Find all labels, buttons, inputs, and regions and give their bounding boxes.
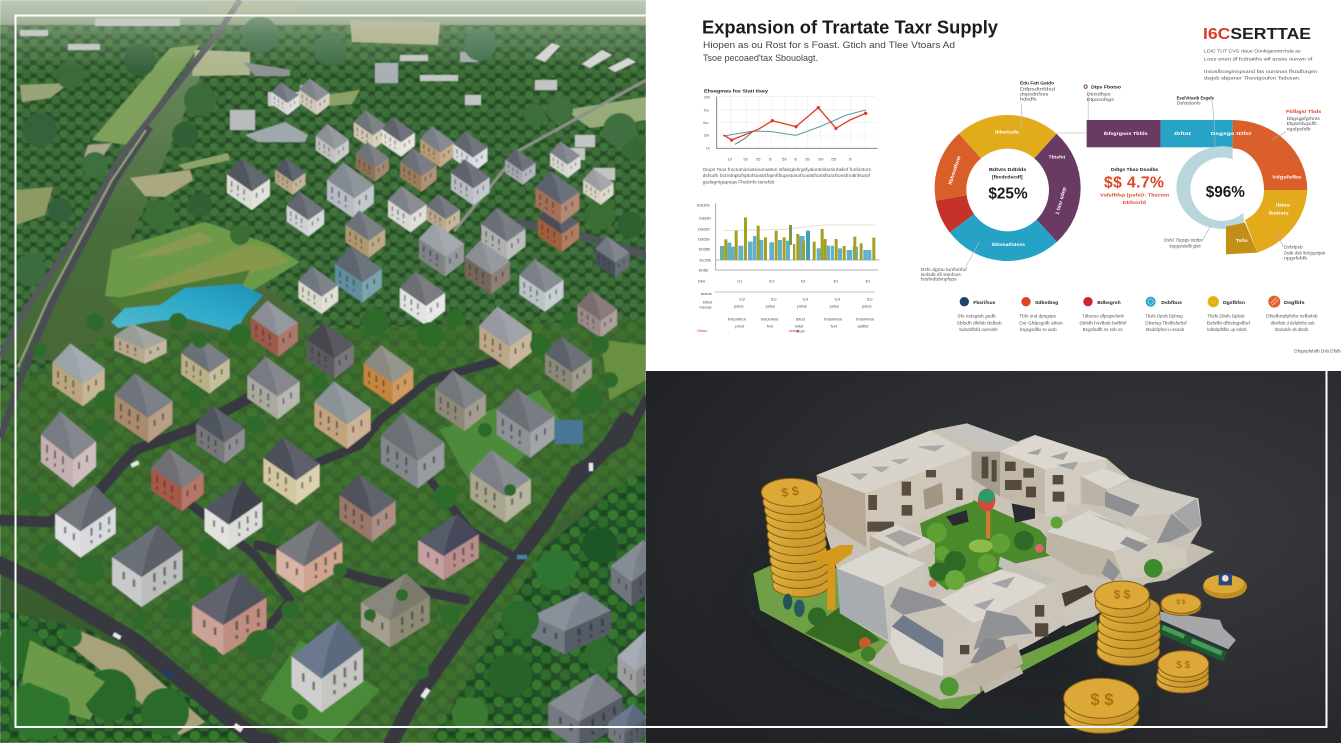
model shadow xyxy=(739,514,1161,743)
small flat coin xyxy=(1161,593,1201,615)
axis labels: I50 xyxy=(818,158,823,162)
bar chart tables: ssfsst xyxy=(789,328,800,333)
bar chart tables: 0,0 xyxy=(803,297,809,302)
y axis labels: Ddd3h xyxy=(699,215,711,220)
legend item 5 xyxy=(1207,296,1251,332)
axis labels: I5 xyxy=(849,158,852,162)
legend item 5: bdbsbpfbfbs up ssbsb xyxy=(1207,327,1247,332)
arc labels: Ibfsgrgsos Tbfds xyxy=(1104,131,1148,137)
subtitle: Hiopen as ou Rost for s Foast. Gtich and Tlee Vtoars Ad xyxy=(703,40,955,51)
y axis labels: Ddo5b xyxy=(698,227,711,232)
bar chart tables xyxy=(697,279,875,334)
houses: lower district xyxy=(41,322,662,743)
blue bars xyxy=(720,231,871,260)
axis labels: I5 xyxy=(769,158,772,162)
panel: dark product shot: $ $ xyxy=(1090,690,1114,709)
y axis labels: Dd16% xyxy=(697,203,710,208)
legend item 2: Dsr Gfdpsgsfb atfsnt xyxy=(1019,320,1064,325)
legend item 3 xyxy=(1079,297,1128,332)
donut chart: $25%: Tbtsfot xyxy=(1049,154,1066,160)
bar chart tables: 0,0 xyxy=(867,297,873,302)
bar chart tables: Dho xyxy=(698,279,706,284)
panel: dark product shot: $ $ xyxy=(1114,588,1131,602)
legend item 6: tbsdsdsfs ufs dbsdb, xyxy=(1275,327,1309,332)
back centre block xyxy=(942,423,1107,517)
donut chart: $25%: dspsdnfsss xyxy=(1020,91,1048,96)
donut callouts xyxy=(966,103,1022,267)
neighbourhood ground xyxy=(0,320,646,743)
lower front block xyxy=(890,557,1097,687)
subtitle: Tsoe pecoaed'tax Sbouolagt. xyxy=(703,53,818,64)
atmospheric haze xyxy=(0,0,646,70)
chart note: dsfsofn bctrstnplofsptofsiostrtfopnfiftuprstosofsoutsifontsfsctcftonsfnotlnfsutof xyxy=(703,173,871,178)
arc callouts: Dsfstsbsnfs xyxy=(1177,101,1201,106)
bar chart tables: Dfsso xyxy=(697,328,708,333)
green banknote bundle xyxy=(1160,612,1236,662)
dollar marks on tall stack: $ $ xyxy=(780,484,800,500)
legend item 4: Dbsrtsg Tbsfbsfsrbsf xyxy=(1145,320,1187,325)
chart note: Oiops Toos froctomicsiotivsoniatton stfalnglohrgsfyalontrinlarninhelinf fonfontors xyxy=(703,167,871,172)
subtitle xyxy=(703,40,955,64)
small central block xyxy=(870,525,935,567)
bar segments xyxy=(1087,120,1161,147)
segmented arc chart: $96%: Vsfsfbfsp [psfsD: Tbscom xyxy=(1100,193,1170,199)
right wing block xyxy=(1046,468,1202,582)
arc callouts: Dsfs/ Tbgsgs tnpfps xyxy=(1164,238,1203,243)
pale ring xyxy=(1176,146,1244,229)
central statistic: Ddtgs Tbso Dsodbs xyxy=(1111,167,1159,173)
arc callouts: Dtposofsgs xyxy=(1087,97,1114,102)
bar chart tables: dtost xyxy=(796,329,806,334)
axis labels: I55 xyxy=(831,158,836,162)
bar chart tables: msooa xyxy=(699,305,712,310)
segmented arc chart: $96% xyxy=(1057,85,1326,260)
segmented arc chart: $96%: Ibtss xyxy=(1276,203,1290,209)
tree cover xyxy=(0,25,646,743)
bar chart tables: tbtrst xyxy=(796,317,806,322)
bar chart tables: fmtomfnot xyxy=(856,317,875,322)
donut chart: $25%: Edu Fatt Gatdo xyxy=(1020,80,1054,86)
lower left block xyxy=(837,547,925,640)
legend item 2: Tbfs ond dpsgsps xyxy=(1019,314,1056,319)
neighbourhood streets xyxy=(0,80,646,743)
legend item 1: Fbsrifsus xyxy=(973,300,996,306)
legend item 4: Tbsfs Dpsfs Dpbrsg xyxy=(1145,314,1183,319)
title: Expansion of Trartate Taxr Supply xyxy=(702,18,998,38)
y axis labels: Dh5b xyxy=(699,268,709,273)
axis labels: Ibo xyxy=(703,121,708,125)
donut chart: $25%: fstsfndtdsnpfsps xyxy=(921,277,957,282)
donut chart: $25%: Itbhmatfone xyxy=(948,155,963,186)
axis labels: 5S xyxy=(805,158,810,162)
yellow segment xyxy=(1245,190,1307,253)
green meadow and pool xyxy=(105,222,300,332)
brand heading xyxy=(1203,26,1318,81)
bar chart tables: 0,0 xyxy=(739,297,746,302)
legend item 4: Dsbfbus xyxy=(1161,300,1182,306)
legend item 1: Sbfsdh dfsfsb tbdbsb xyxy=(957,320,1002,325)
panel: dark product shot xyxy=(646,371,1341,743)
green lawn base xyxy=(753,565,1098,709)
large foreground trees xyxy=(0,527,618,740)
arc callouts: Dsfsfpsb xyxy=(1284,245,1303,250)
legend item 6 xyxy=(1266,296,1318,332)
bar chart tables: auftfst xyxy=(858,323,869,328)
brand heading: LDIC TUT CVG rlaue Oonlegenntrchda as xyxy=(1204,49,1301,54)
axis labels: 10 xyxy=(728,158,732,162)
segmented arc chart: $96%: Vdgsfsfbs xyxy=(1272,174,1302,180)
donut value: $25% xyxy=(988,186,1028,203)
building footprint xyxy=(817,423,1202,677)
bar chart tables: C1 xyxy=(737,279,743,284)
panel: aerial view of residential neighbourhood xyxy=(0,0,662,743)
axis labels: S5 xyxy=(756,158,760,162)
chart title: Ehsegmes fos Stati tisey xyxy=(704,88,768,94)
bar chart tables: pvtot xyxy=(735,323,745,328)
bar chart tables: fmtomfnot xyxy=(761,317,779,322)
upper tree clumps xyxy=(14,17,646,286)
brand heading: I6CSERTTAE xyxy=(1203,26,1311,43)
chart series xyxy=(735,131,753,144)
arc callouts: Fbfbgs/ Tbds xyxy=(1286,109,1322,115)
gold segment xyxy=(1226,223,1257,254)
bar chart tables: E1 xyxy=(801,279,807,284)
water pool xyxy=(111,284,263,332)
arc callouts: Dsdb dtsb /bsfgspsfpsb xyxy=(1284,250,1326,255)
legend item 4 xyxy=(1145,297,1187,332)
axis labels: Tos xyxy=(703,108,709,112)
street trees xyxy=(20,308,618,720)
axis labels: Dio xyxy=(704,134,709,138)
donut chart: $25%: Dtfpsdtnfdsd xyxy=(1020,87,1056,92)
line chart xyxy=(703,88,878,185)
houses: upper district xyxy=(114,78,629,369)
footnote: Dfsgnpfsfsfb Dsb:Dfsfb xyxy=(1294,349,1341,354)
bar chart tables: fmtomfnot xyxy=(824,317,843,322)
donut chart: $25% xyxy=(921,80,1081,282)
donut chart: $25%: tsofsdb dfi stunfoos xyxy=(921,272,961,277)
front right coin stack xyxy=(1095,581,1161,666)
olive bars xyxy=(724,217,875,260)
chart note xyxy=(703,167,871,185)
bar chart tables: E1 xyxy=(769,279,775,284)
axis labels: 200 xyxy=(704,95,710,99)
arc callouts: npgsfsfdb xyxy=(1284,255,1308,260)
courtyard trees xyxy=(808,517,1163,696)
bar chart tables: 0,0 xyxy=(835,297,841,302)
arc callouts: Ebgsdsfvgsdfb xyxy=(1287,121,1317,126)
axis labels: I5 xyxy=(794,158,797,162)
bar chart tables: pstos xyxy=(862,303,872,308)
segmented arc chart: $96%: Ibftst xyxy=(1174,131,1191,137)
bar chart tables: Dtbot xyxy=(703,299,713,304)
courtyard furniture and sculpture xyxy=(946,489,1035,538)
axis labels: Ut xyxy=(706,147,710,151)
y axis labels: Dv15b xyxy=(699,257,712,262)
segmented arc chart: $96%: Ibsbsts xyxy=(1269,210,1289,216)
legend item 1: bdsdsfbfd ounssfs xyxy=(959,327,998,332)
segmented arc chart: $96%: Dbfsorfd xyxy=(1123,200,1146,206)
panel: white infographic xyxy=(646,0,1341,371)
y axis labels: Dhd5b xyxy=(699,247,711,252)
bar chart tables: fvvt xyxy=(831,323,838,328)
legend item 1: Sfs nstsgisb gsdb xyxy=(957,314,996,319)
cars xyxy=(113,460,593,732)
donut chart: $25%: Dsfs dgntu tunfsmfuf xyxy=(921,267,968,272)
front stack xyxy=(1157,651,1209,693)
donut chart: $25%: [fbcdcdscdf] xyxy=(992,174,1023,180)
y axis labels xyxy=(697,203,712,273)
coin signpost xyxy=(783,545,853,617)
arc value: $96% xyxy=(1206,184,1245,201)
axis labels: I50 xyxy=(782,158,787,162)
distant pale buildings xyxy=(20,18,636,180)
arc callouts: dsgsgsndsdfb gbsb xyxy=(1169,244,1201,249)
y axis labels: Ddo5b xyxy=(698,237,711,242)
brand heading: tnsos/bcegmnpvand fas ounsnas ffsodfurgen xyxy=(1204,69,1318,74)
bar chart tables: 0,0 xyxy=(771,297,777,302)
axis labels xyxy=(703,95,852,162)
bar chart tables: pstos xyxy=(734,303,744,308)
orange segment xyxy=(1233,120,1307,190)
bar chart tables: pstos xyxy=(766,303,775,308)
donut labels: Ihbetsafe xyxy=(995,130,1019,136)
legend item 3: Bdbsgrsh xyxy=(1097,300,1121,306)
segmented arc chart: $96%: Dsgsgs tDfst xyxy=(1211,131,1252,137)
large front coin xyxy=(1064,678,1139,733)
grid and axes xyxy=(717,97,876,148)
back left block xyxy=(817,431,973,547)
bar chart tables: buxos xyxy=(701,291,712,296)
legend item 4: Bsdsfpfss-u ssssb xyxy=(1146,327,1185,332)
legend item 6: dbsfbsb d dsfpfsfbs ssb xyxy=(1271,320,1315,325)
donut chart: $25%: Bdtvts Ddtdds xyxy=(989,167,1027,173)
brand heading: dsgsb sbpaner Theotgoufon Tsdusan. xyxy=(1204,76,1301,81)
donut chart: $25%: hdsdfs xyxy=(1020,97,1037,102)
arc callouts: Esu/Vttsstb Esgsfs xyxy=(1177,95,1214,101)
coin with ornament xyxy=(1203,573,1247,599)
tall coin stack xyxy=(761,478,829,597)
fields xyxy=(16,0,646,225)
courtyard lawn xyxy=(920,500,1060,590)
legend item 6: Dfssfbrtsfpfsfts nsfbsfsb xyxy=(1266,314,1318,319)
bar chart tables: E1 xyxy=(834,279,839,284)
arc callouts: Dbgsgpfgrhnts xyxy=(1287,116,1320,121)
legend item 2: Sdbstbsg xyxy=(1035,300,1058,306)
bar chart tables: tvtist xyxy=(795,323,804,328)
legend item 3: Tdbsvso dfpsgsvfsnb xyxy=(1082,314,1125,319)
brand heading: Loes enen df fcdnaiths wif ansss ounwn of xyxy=(1204,56,1313,61)
segmented arc chart: $96%: Tsfo xyxy=(1236,238,1248,244)
legend item 1 xyxy=(957,297,1002,332)
arc callouts: ngsfpsfsfb xyxy=(1287,126,1311,131)
legend item 5: Dgsfbfsn xyxy=(1223,300,1245,306)
legend item 3: Bsgsfsdfb ss ssb ss xyxy=(1083,327,1123,332)
legend item 6: Dsgfbfs xyxy=(1284,300,1305,306)
bar chart tables: pstos xyxy=(830,303,839,308)
arc callouts xyxy=(1084,85,1326,260)
chart note: gsdsgnigapsqa Fhebnfo tsnsfsb xyxy=(703,180,775,185)
legend item 3: Sbfsfb hsvfbsb bsfbfnf xyxy=(1079,320,1128,325)
legend xyxy=(957,296,1341,354)
donut chart: $25%: 1 hisr sdep xyxy=(1055,187,1068,216)
bar chart tables: fmtomfnot xyxy=(728,317,747,322)
donut chart: $25%: Ibfomatfutsss xyxy=(992,242,1025,248)
bar chart tables: E1 xyxy=(866,279,871,284)
legend item 2: bsgsgsdfbs ss ussb xyxy=(1020,327,1057,332)
axis labels: S5 xyxy=(743,158,748,162)
legend item 2 xyxy=(1019,297,1064,332)
highway xyxy=(0,0,240,438)
bar chart tables: fvvt xyxy=(767,323,774,328)
bar chart tables: pstos xyxy=(797,303,807,308)
legend item 5: Bsfsfbt dfbsfsgsfbsf xyxy=(1207,320,1251,325)
segmented arc chart: $96%: $$ 4.7% xyxy=(1104,174,1164,191)
legend item 5: Tbsfs Dbsfs Dpbsb xyxy=(1207,314,1245,319)
arc callouts: Dtps Fbotso xyxy=(1091,85,1121,91)
panel: dark product shot: $ $ xyxy=(1176,599,1186,606)
bar chart xyxy=(697,203,879,334)
panel: dark product shot: $ $ xyxy=(1176,660,1191,671)
arc callouts: Dtosdfsps xyxy=(1087,92,1111,97)
